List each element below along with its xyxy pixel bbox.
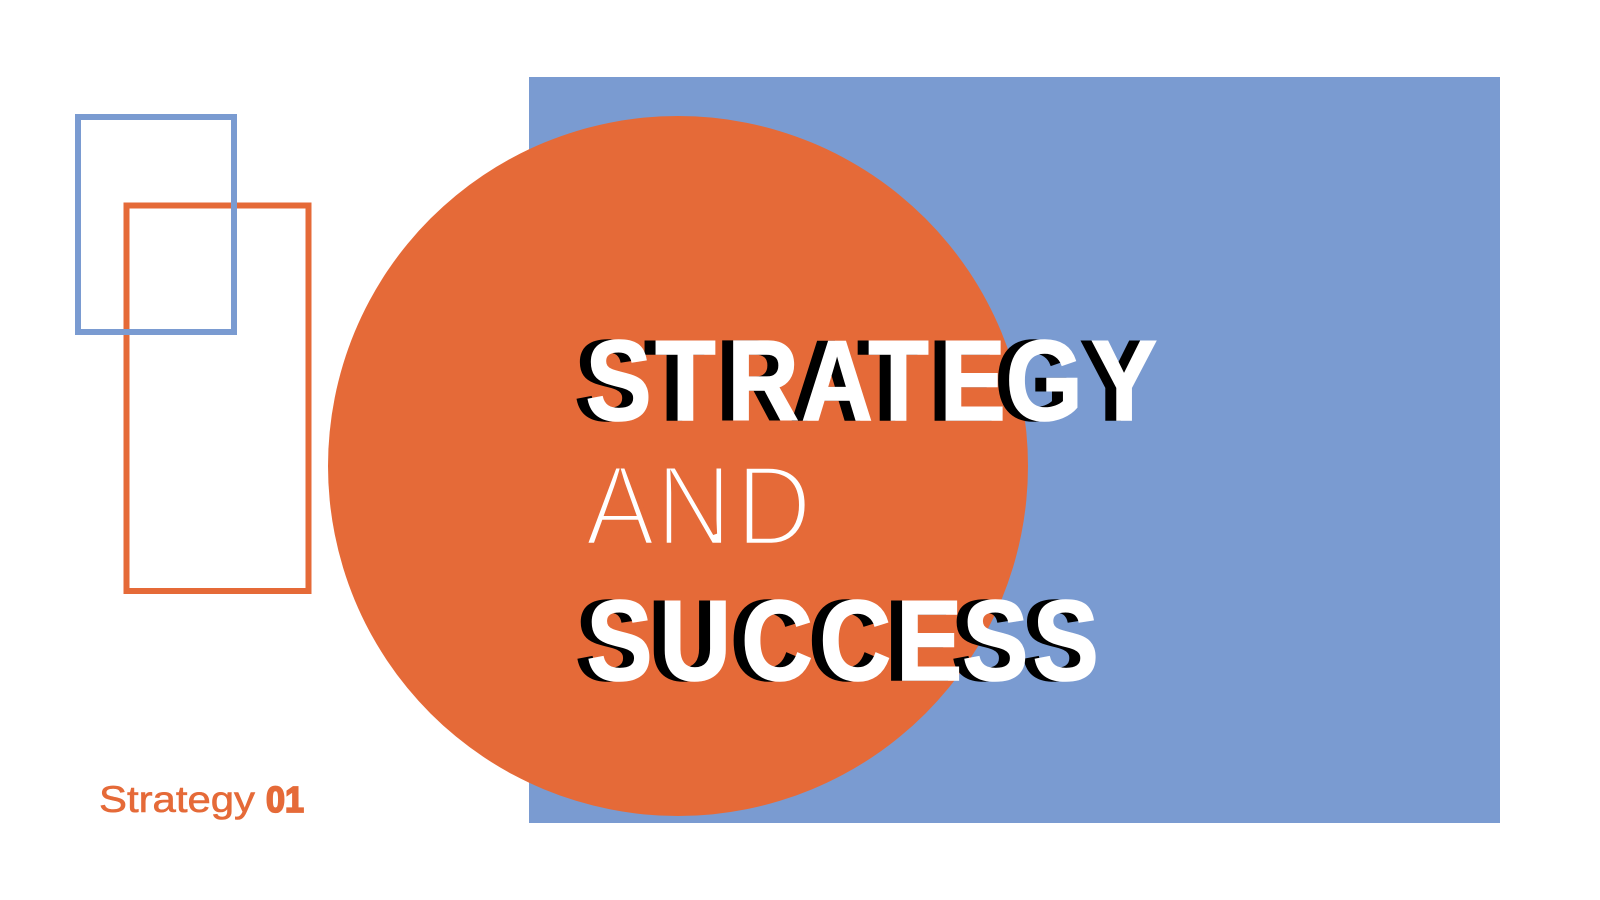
heading: SUCCESS: [575, 577, 1099, 705]
heading: AND: AND: [585, 443, 812, 570]
orange outline rectangle: [126, 206, 308, 591]
heading shadow: STRATEGY: STRATEGY: [575, 317, 1146, 445]
blue outline rectangle: [78, 117, 234, 332]
heading shadow: SUCCESS: SUCCESS: [575, 577, 1088, 705]
heading face: STRATEGY: STRATEGY: [586, 317, 1157, 445]
label text: Strategy: [99, 779, 256, 820]
footer label: Strategy 01: [99, 779, 304, 820]
label number: 01: [266, 779, 304, 820]
panel: blue rectangle background: [529, 77, 1500, 823]
orange circle: [328, 116, 1028, 816]
heading face: SUCCESS: SUCCESS: [586, 577, 1099, 705]
heading: STRATEGY: [575, 317, 1157, 445]
